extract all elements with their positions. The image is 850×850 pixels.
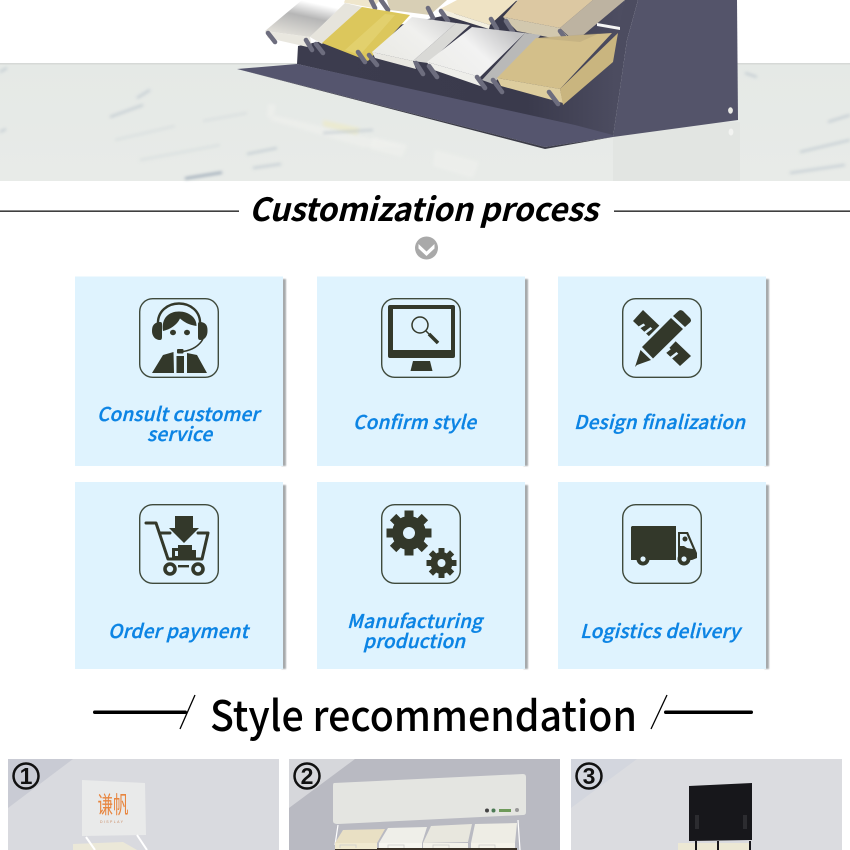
product photo 2 bbox=[289, 759, 560, 850]
number badge 1: 1 bbox=[20, 763, 33, 789]
sample 5 tan bbox=[497, 33, 612, 89]
sample 4 white bbox=[427, 27, 525, 77]
number badge 3: 3 bbox=[583, 763, 595, 789]
panel: logistics delivery bbox=[558, 482, 769, 669]
label bbox=[97, 400, 262, 447]
number badge 3 bbox=[576, 763, 602, 789]
product photo 1: 谦帆 bbox=[98, 786, 129, 820]
label bbox=[347, 607, 485, 654]
number badge 2 bbox=[294, 763, 320, 789]
icon: customer service agent bbox=[140, 299, 218, 377]
icon: shopping cart with arrow bbox=[140, 505, 218, 583]
black board bbox=[689, 783, 752, 841]
label: production bbox=[363, 627, 466, 654]
label: Manufacturing bbox=[347, 607, 485, 634]
heading: Style recommendation: Style recommendation bbox=[210, 683, 637, 744]
label: service bbox=[147, 420, 214, 447]
floor reflection of stand bbox=[267, 104, 740, 181]
hero photo: sample display stand on marble bbox=[0, 0, 850, 181]
panel: consult customer service bbox=[75, 276, 286, 466]
panel: manufacturing production bbox=[317, 482, 528, 669]
label: Design finalization bbox=[574, 408, 746, 435]
number badge 2: 2 bbox=[301, 763, 313, 789]
panel: confirm style bbox=[317, 276, 528, 466]
label: Logistics delivery bbox=[580, 617, 743, 644]
product photo 1 bbox=[8, 759, 279, 850]
sample 1 grey bbox=[265, 0, 345, 37]
product photo 3 bbox=[571, 759, 842, 850]
stand side panel bbox=[613, 0, 638, 137]
sample tiles bbox=[678, 841, 750, 850]
label: Confirm style bbox=[353, 408, 478, 435]
label: Consult customer bbox=[97, 400, 262, 427]
lower row samples bbox=[265, 0, 618, 105]
icon: delivery truck bbox=[623, 505, 701, 583]
heading: Style recommendation bbox=[93, 683, 753, 744]
panel: design finalization bbox=[558, 276, 769, 466]
icon: ruler and pencil bbox=[623, 299, 701, 377]
heading: Customization process: Customization process bbox=[249, 185, 601, 231]
white header sign bbox=[333, 774, 526, 824]
icon: monitor with magnifier bbox=[382, 299, 460, 377]
label: Order payment bbox=[108, 617, 250, 644]
icon: chevron down badge bbox=[415, 236, 438, 260]
product photo 1: DISPLAY bbox=[100, 820, 124, 824]
stand base plate bbox=[237, 64, 613, 147]
white sign with logo bbox=[82, 780, 146, 836]
panel: order payment bbox=[75, 482, 286, 669]
sample tiles bbox=[335, 823, 517, 850]
marble floor bbox=[0, 63, 850, 181]
icon: gears bbox=[382, 505, 460, 583]
upper row samples bbox=[330, 0, 625, 42]
number badge 1 bbox=[14, 763, 38, 789]
stand back wall bbox=[297, 0, 625, 137]
sample 2 yellow bbox=[322, 7, 410, 61]
sample 3 white bbox=[372, 17, 456, 61]
